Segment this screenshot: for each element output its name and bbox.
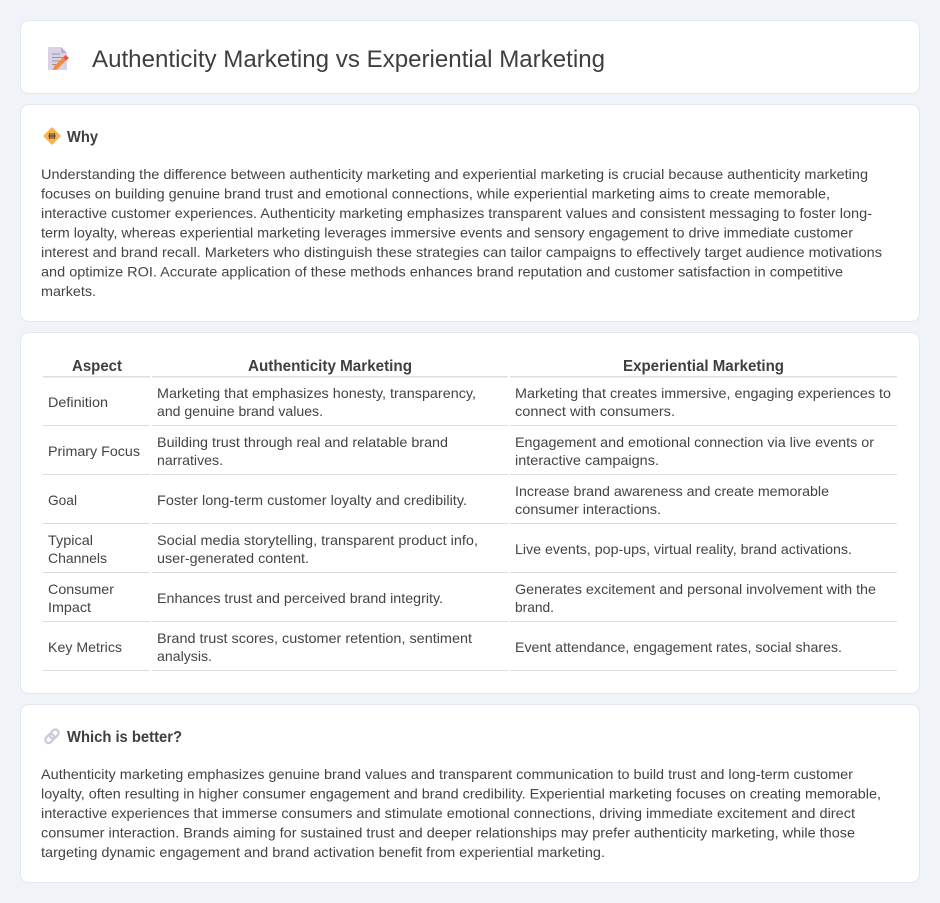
table row: definition: Definition — [48, 394, 108, 410]
table row: typical channels: Channels — [48, 550, 107, 566]
table row: typical channels: Social media storytelling, transparent product info, — [157, 532, 478, 548]
table row: key metrics — [43, 630, 897, 671]
text block: why paragraph: interactive customer experiences. Authenticity marketing emphasizes transparent values and consistent messaging to foster long- — [41, 205, 872, 221]
table row: primary focus — [43, 434, 897, 475]
table header row: Experiential Marketing — [623, 358, 784, 375]
table row: primary focus: Engagement and emotional connection via live events or — [515, 434, 874, 450]
table row: typical channels — [43, 532, 897, 573]
table row: primary focus: narratives. — [157, 452, 223, 468]
table row: key metrics: Key Metrics — [48, 639, 122, 655]
table row: goal — [43, 483, 897, 524]
text block: why paragraph: focuses on building genuine brand trust and emotional connections, while experiential marketing aims to create memorable, — [41, 186, 830, 202]
table row: definition: Marketing that emphasizes honesty, transparency, — [157, 385, 476, 401]
table row: key metrics: Brand trust scores, customer retention, sentiment — [157, 630, 472, 646]
text block: which is better paragraph: Authenticity marketing emphasizes genuine brand values and transparent communication to build trust and long-term customer — [41, 766, 853, 782]
heading: why: Why — [67, 129, 98, 146]
text block: which is better paragraph — [41, 766, 881, 860]
title: Authenticity Marketing vs Experiential Marketing — [92, 46, 605, 73]
panel: page header — [20, 20, 920, 94]
table row: typical channels: user-generated content. — [157, 550, 309, 566]
table row: consumer impact: Impact — [48, 599, 91, 615]
table row: definition — [43, 385, 897, 426]
icon: memo with pencil — [48, 47, 69, 70]
table row: primary focus: Building trust through real and relatable brand — [157, 434, 448, 450]
heading: which is better: Which is better? — [67, 729, 182, 746]
table header row: Aspect — [72, 358, 123, 375]
panel: comparison table — [20, 332, 920, 694]
table row: definition: and genuine brand values. — [157, 403, 323, 419]
text block: which is better paragraph: targeting dynamic engagement and brand activation benefit from experiential marketing. — [41, 844, 605, 860]
table header row: Authenticity Marketing — [248, 358, 412, 375]
text block: why paragraph: and optimize ROI. Accurate application of these methods enhances brand reputation and customer satisfaction in competitive — [41, 264, 843, 280]
table header row — [43, 358, 897, 378]
table row: consumer impact: Enhances trust and perceived brand integrity. — [157, 590, 443, 606]
table row: key metrics: Event attendance, engagement rates, social shares. — [515, 639, 842, 655]
table row: consumer impact: brand. — [515, 599, 554, 615]
panel: why — [20, 104, 920, 322]
text block: which is better paragraph: interactive experiences that immerse consumers and stimulate emotional connections, driving immediate excitement and direct — [41, 805, 855, 821]
table row: goal: Increase brand awareness and create memorable — [515, 483, 829, 499]
table row: consumer impact: Generates excitement and personal involvement with the — [515, 581, 876, 597]
table row: definition: connect with consumers. — [515, 403, 675, 419]
table row: consumer impact: Consumer — [48, 581, 114, 597]
text block: why paragraph — [41, 166, 882, 299]
table row: goal: consumer interactions. — [515, 501, 661, 517]
icon: chain link — [44, 728, 60, 744]
table row: typical channels: Live events, pop-ups, virtual reality, brand activations. — [515, 541, 852, 557]
table row: primary focus: interactive campaigns. — [515, 452, 659, 468]
table row: definition: Marketing that creates immersive, engaging experiences to — [515, 385, 891, 401]
text block: why paragraph: Understanding the difference between authenticity marketing and experiential marketing is crucial because authenticity marketing — [41, 166, 868, 182]
table row: goal: Goal — [48, 492, 77, 508]
text block: which is better paragraph: consumer interaction. Brands aiming for sustained trust and deeper relationships may prefer authenticity marketing, while those — [41, 824, 855, 840]
table row: consumer impact — [43, 581, 897, 622]
text block: which is better paragraph: loyalty, often resulting in higher consumer engagement and brand credibility. Experiential marketing focuses on creating memorable, — [41, 786, 881, 802]
text block: why paragraph: markets. — [41, 283, 96, 299]
table row: goal: Foster long-term customer loyalty and credibility. — [157, 492, 467, 508]
panel: which is better — [20, 704, 920, 882]
icon: warning diamond — [44, 128, 60, 144]
table row: typical channels: Typical — [48, 532, 93, 548]
table row: primary focus: Primary Focus — [48, 443, 140, 459]
table row: key metrics: analysis. — [157, 648, 212, 664]
text block: why paragraph: term loyalty, whereas experiential marketing leverages immersive events and sensory engagement to drive immediate customer — [41, 224, 853, 240]
text block: why paragraph: interest and brand recall. Marketers who distinguish these strategies can tailor campaigns to effectively target audience motivations — [41, 244, 882, 260]
